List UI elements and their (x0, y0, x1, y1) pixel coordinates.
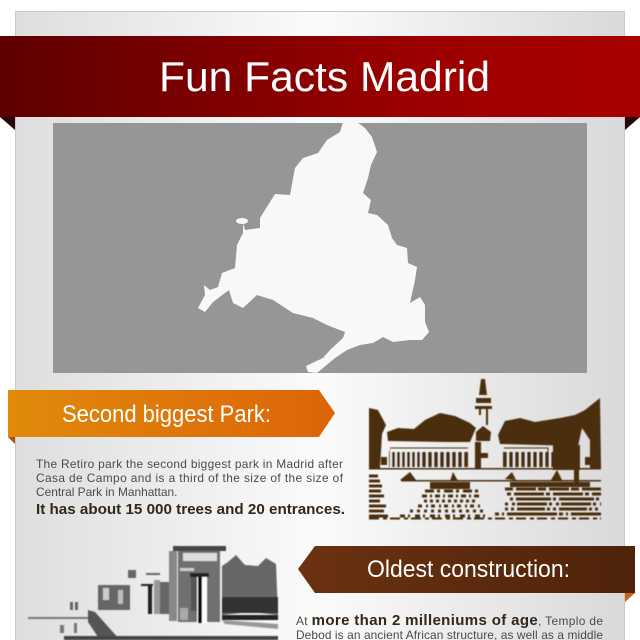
heading: Oldest construction: (367, 556, 570, 583)
park text block (36, 457, 345, 518)
photo: Retiro park monument (369, 379, 601, 518)
park text block: Casa de Campo and is a third of the size of the size of (36, 471, 344, 485)
brown ribbon: oldest construction (298, 546, 635, 602)
heading: Second biggest Park: (62, 401, 271, 428)
temple text block: At more than 2 milleniums of age, Templo de (296, 612, 603, 629)
park text block: It has about 15 000 trees and 20 entrances. (36, 501, 345, 518)
map panel (53, 122, 587, 373)
colonnades (390, 448, 548, 467)
title: Fun Facts Madrid (159, 53, 490, 100)
park text block: Central Park in Manhattan. (36, 485, 177, 499)
park text block: The Retiro park the second biggest park in Madrid after (36, 457, 343, 471)
title banner (0, 36, 640, 130)
map of Madrid region (198, 122, 429, 373)
lake and boats (400, 470, 579, 482)
temple text block (296, 612, 603, 640)
photo: Temple of Debod (28, 546, 278, 640)
orange ribbon: second biggest park (8, 390, 335, 444)
